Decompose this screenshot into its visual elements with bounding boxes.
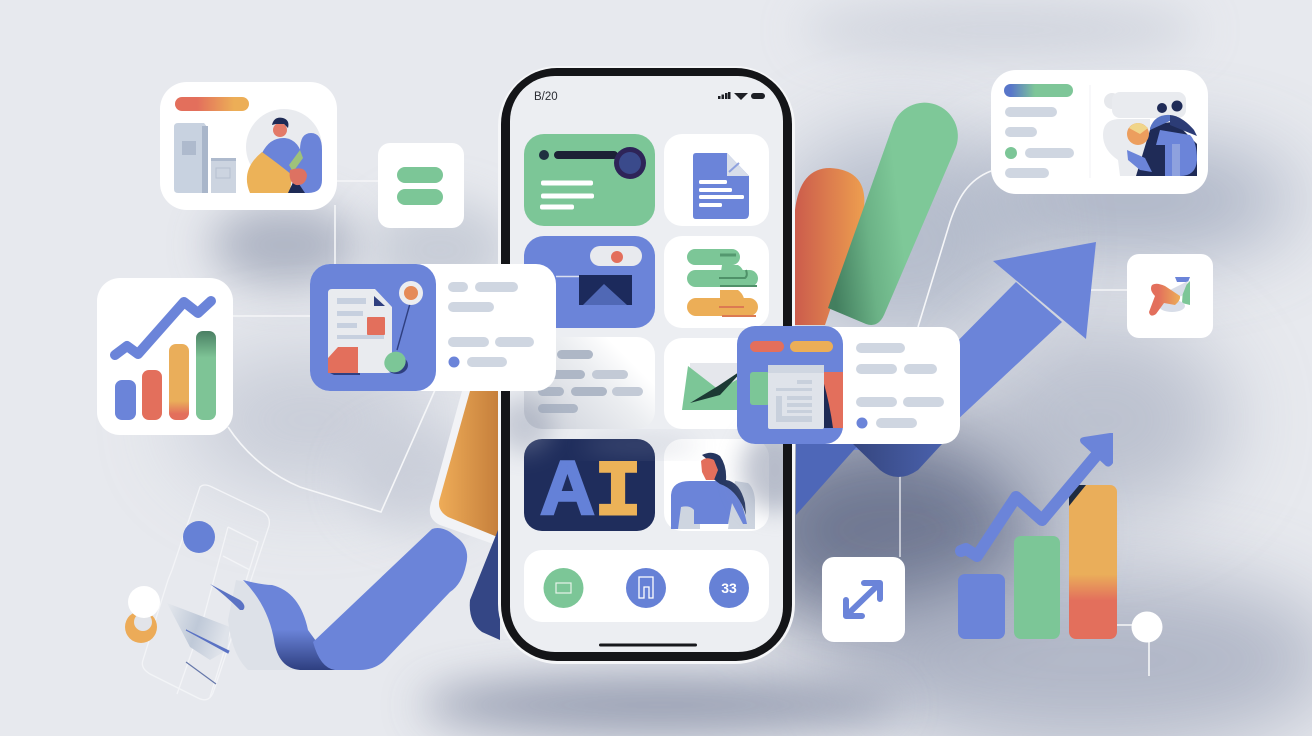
decorative coins bbox=[125, 521, 215, 643]
card: small logo mark bbox=[1127, 254, 1213, 338]
text pills bbox=[448, 282, 534, 367]
home indicator bbox=[599, 644, 697, 646]
red bar bbox=[790, 168, 864, 325]
phone body bbox=[498, 66, 795, 664]
person illustration bbox=[246, 109, 322, 193]
gradient title pill bbox=[1004, 84, 1073, 97]
nav icon: number 33 bbox=[709, 568, 749, 608]
tile: blue mail bbox=[524, 236, 655, 328]
card: green toggle icon bbox=[378, 143, 464, 228]
nav icon: book bbox=[626, 568, 666, 608]
ribbon band bbox=[167, 528, 467, 684]
tile: stacked pills bbox=[664, 236, 769, 328]
orange bar behind phone with white edge bbox=[430, 391, 510, 640]
tile: woman portrait bbox=[664, 439, 769, 531]
trend line bbox=[115, 301, 211, 355]
blue icon panel bbox=[737, 326, 843, 444]
status time: B/20 bbox=[534, 91, 558, 103]
trend arrow bbox=[961, 451, 1100, 556]
tile: AI badge: I bbox=[595, 450, 641, 538]
card: team profile bbox=[991, 70, 1208, 194]
phone bbox=[497, 66, 809, 664]
pin bbox=[380, 281, 423, 377]
tile: green envelope bbox=[664, 338, 769, 429]
status icons bbox=[718, 92, 765, 100]
title pill bbox=[175, 97, 249, 111]
chart marker dot bbox=[1132, 612, 1162, 642]
big rising arrow bbox=[796, 242, 1096, 515]
bottom right bar chart bbox=[958, 433, 1117, 639]
green bar bbox=[828, 103, 958, 325]
shadow cast on the screen by floating cards bbox=[497, 397, 809, 512]
document illustration bbox=[328, 289, 392, 375]
team illustration bbox=[1103, 92, 1197, 176]
text pills bbox=[1005, 107, 1074, 178]
connector lines bbox=[228, 171, 1149, 676]
bottom nav bar bbox=[524, 550, 769, 622]
card: expand arrows icon bbox=[822, 557, 905, 642]
card: bar and line chart bbox=[97, 278, 233, 435]
card: person with cabinets bbox=[160, 82, 337, 210]
wireframe phone outline bbox=[142, 485, 269, 700]
tile: AI badge: A bbox=[540, 446, 595, 531]
tile: document bbox=[664, 134, 769, 226]
text pills bbox=[856, 343, 944, 428]
blue icon panel bbox=[310, 264, 436, 391]
tile: AI badge bbox=[524, 439, 655, 538]
nav icon: number 33: 33 bbox=[721, 580, 737, 596]
card: document detail bbox=[310, 264, 556, 391]
cabinets bbox=[174, 123, 236, 193]
bars bbox=[115, 331, 216, 420]
tile: text lines bbox=[524, 337, 655, 429]
bars bbox=[958, 574, 1005, 639]
tile: green profile bbox=[524, 134, 655, 226]
nav icon: green rectangle bbox=[544, 568, 584, 608]
window illustration bbox=[750, 341, 843, 429]
card: overlay layout detail bbox=[737, 326, 960, 444]
